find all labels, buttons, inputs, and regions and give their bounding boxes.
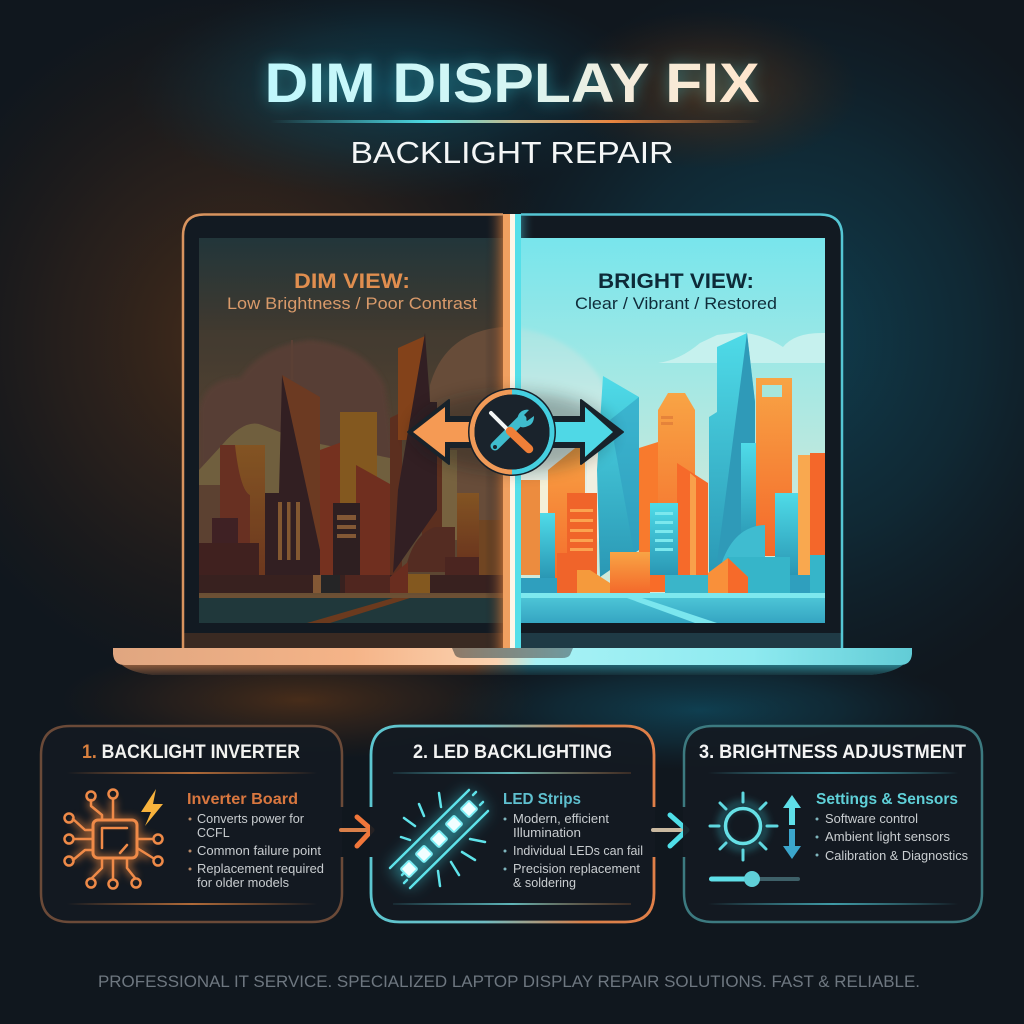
text: settings and sensors: Calibration & Diagnostics bbox=[825, 849, 968, 863]
dim screen caption: DIM VIEW: bbox=[294, 270, 410, 293]
text: settings and sensors: Ambient light sensors bbox=[825, 830, 950, 844]
panel heading: 3. BRIGHTNESS ADJUSTMENT bbox=[699, 741, 966, 763]
text: led strips bbox=[503, 791, 643, 890]
panel: backlight inverter bbox=[40, 725, 342, 923]
centre divider bbox=[503, 214, 521, 648]
dim edge fade bbox=[485, 216, 503, 648]
laptop notch bbox=[452, 648, 573, 658]
subtitle: BACKLIGHT REPAIR bbox=[350, 135, 674, 170]
bright screen caption: BRIGHT VIEW: bbox=[598, 270, 754, 293]
text: settings and sensors: Settings & Sensors bbox=[816, 791, 958, 808]
bright screen bbox=[515, 238, 825, 623]
panel: led backlighting bbox=[370, 725, 655, 923]
comparison slider control bbox=[408, 388, 623, 476]
footer: PROFESSIONAL IT SERVICE. SPECIALIZED LAPTOP DISPLAY REPAIR SOLUTIONS. FAST & RELIABLE. bbox=[98, 972, 920, 991]
icon: sun with arrows and slider bbox=[709, 793, 801, 887]
panel heading: 1. BACKLIGHT INVERTER bbox=[82, 741, 300, 763]
arrow left bbox=[408, 400, 480, 464]
title underline bbox=[270, 120, 760, 123]
title: DIM DISPLAY FIX bbox=[264, 51, 760, 114]
panel: brightness adjustment bbox=[683, 725, 983, 923]
icon: circuit chip with lightning bbox=[64, 789, 163, 888]
dim screen caption bbox=[227, 270, 477, 313]
arrow: step 1 to 2 bbox=[341, 817, 372, 846]
text: inverter board: Converts power for bbox=[197, 812, 304, 826]
text: inverter board: CCFL bbox=[197, 826, 230, 840]
title: DIM DISPLAY FIX bbox=[264, 51, 760, 114]
dim screen bbox=[199, 238, 503, 623]
bright screen caption bbox=[575, 270, 777, 313]
text: led strips: Modern, efficient bbox=[513, 812, 610, 826]
tool badge bbox=[468, 388, 556, 476]
text: inverter board: Common failure point bbox=[197, 844, 322, 858]
text: inverter board: Inverter Board bbox=[187, 791, 298, 808]
text: settings and sensors: Software control bbox=[825, 812, 918, 826]
laptop bbox=[113, 214, 912, 675]
text: settings and sensors bbox=[816, 791, 968, 863]
text: led strips: LED Strips bbox=[503, 791, 581, 808]
laptop lid: dim half bbox=[183, 214, 512, 648]
text: led strips: Individual LEDs can fail bbox=[513, 844, 643, 858]
text: inverter board bbox=[187, 791, 324, 890]
text: inverter board: Replacement required bbox=[197, 862, 324, 876]
dim screen caption: Low Brightness / Poor Contrast bbox=[227, 295, 477, 313]
bright screen caption: Clear / Vibrant / Restored bbox=[575, 295, 777, 313]
icon: led strip bbox=[390, 790, 488, 888]
text: led strips: & soldering bbox=[513, 876, 576, 890]
text: led strips: Precision replacement bbox=[513, 862, 641, 876]
laptop lid: bright half bbox=[512, 214, 842, 648]
panel heading: 2. LED BACKLIGHTING bbox=[413, 741, 612, 763]
arrow: step 2 to 3 bbox=[653, 815, 687, 846]
laptop base bbox=[113, 648, 912, 675]
arrow right bbox=[545, 400, 623, 464]
bright edge shadow bbox=[521, 216, 535, 238]
icon: wrench and screwdriver bbox=[491, 410, 534, 449]
text: led strips: Illumination bbox=[513, 826, 581, 840]
text: inverter board: for older models bbox=[197, 876, 289, 890]
